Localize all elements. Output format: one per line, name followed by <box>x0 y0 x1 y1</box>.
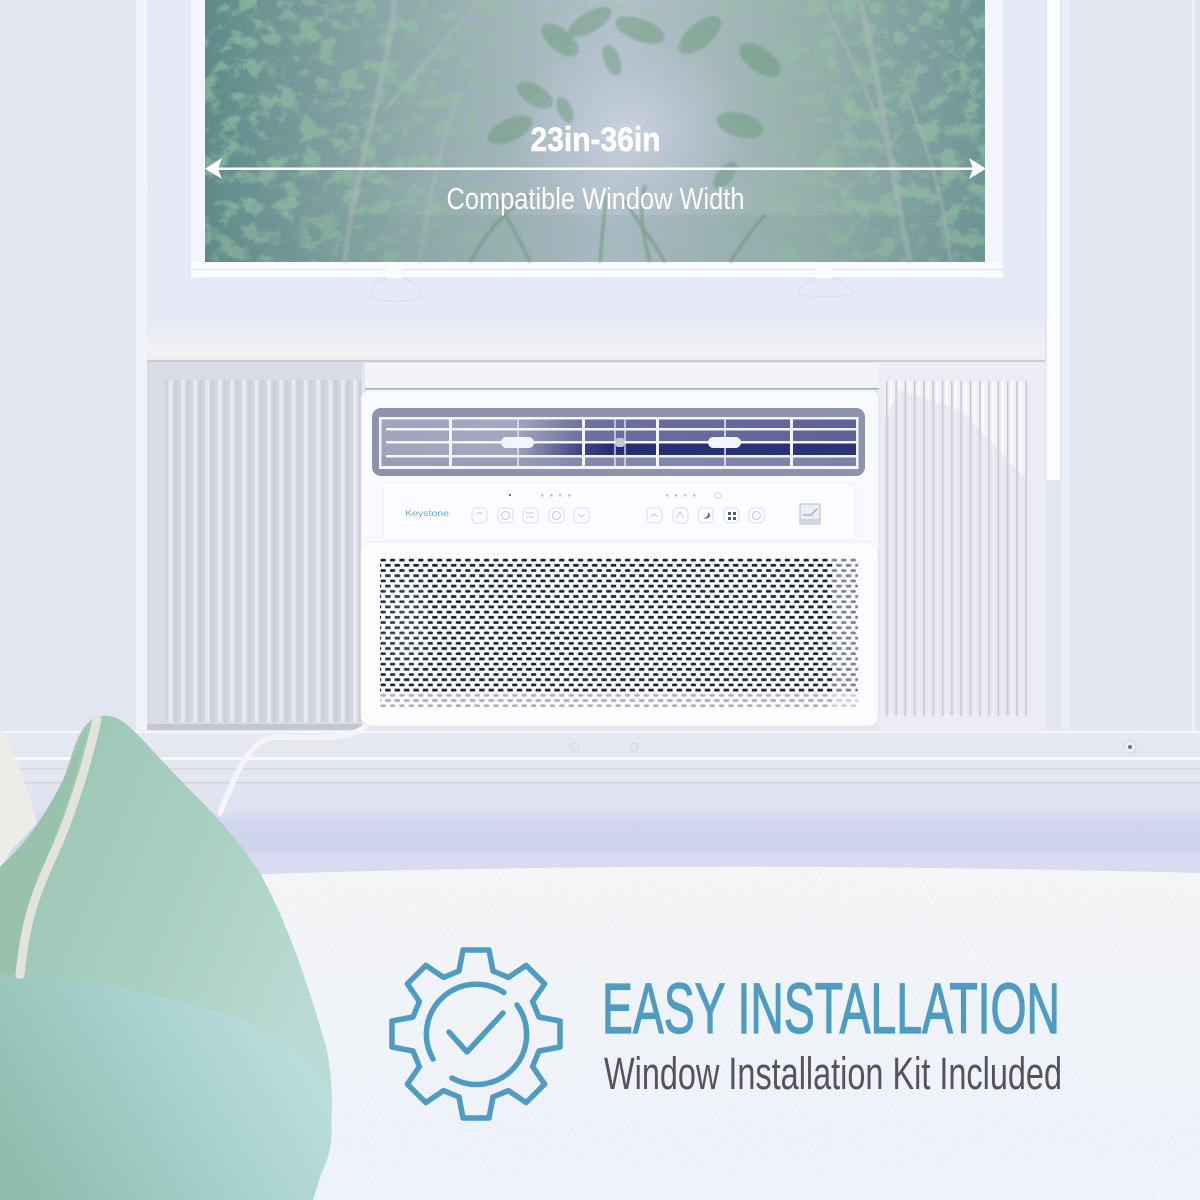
energy star badge <box>800 504 820 524</box>
leaves <box>484 1 787 192</box>
small pillow far left <box>0 727 37 867</box>
side extension panel left <box>147 362 362 730</box>
window glass with foliage <box>205 0 985 262</box>
window sash frame <box>147 0 1045 362</box>
control glyphs <box>477 512 760 520</box>
window sill <box>0 730 1200 875</box>
grass blades <box>470 185 765 262</box>
AC air vent <box>372 408 865 476</box>
bed <box>262 867 1200 1200</box>
control buttons <box>472 508 764 523</box>
AC body <box>361 390 879 726</box>
window latches <box>370 265 854 301</box>
moon and fan glyphs <box>703 512 736 520</box>
width value: 23in-36in <box>530 121 660 159</box>
width dimension arrow <box>205 158 986 179</box>
pillow back <box>0 716 332 1200</box>
brand label: Keystone <box>405 509 450 518</box>
tree trunks <box>345 0 950 262</box>
AC front grille <box>361 542 878 726</box>
indicator dots <box>509 493 721 498</box>
air conditioner unit <box>361 363 879 726</box>
AC top bracket <box>365 363 879 389</box>
right wall trim <box>1045 0 1200 735</box>
power cord <box>220 725 367 813</box>
left wall trim <box>0 0 147 735</box>
pillow front <box>0 978 332 1200</box>
width caption: Compatible Window Width <box>446 181 744 216</box>
icon: gear with check <box>392 950 560 1118</box>
side extension panel right <box>878 362 1047 730</box>
AC control panel <box>383 483 856 540</box>
